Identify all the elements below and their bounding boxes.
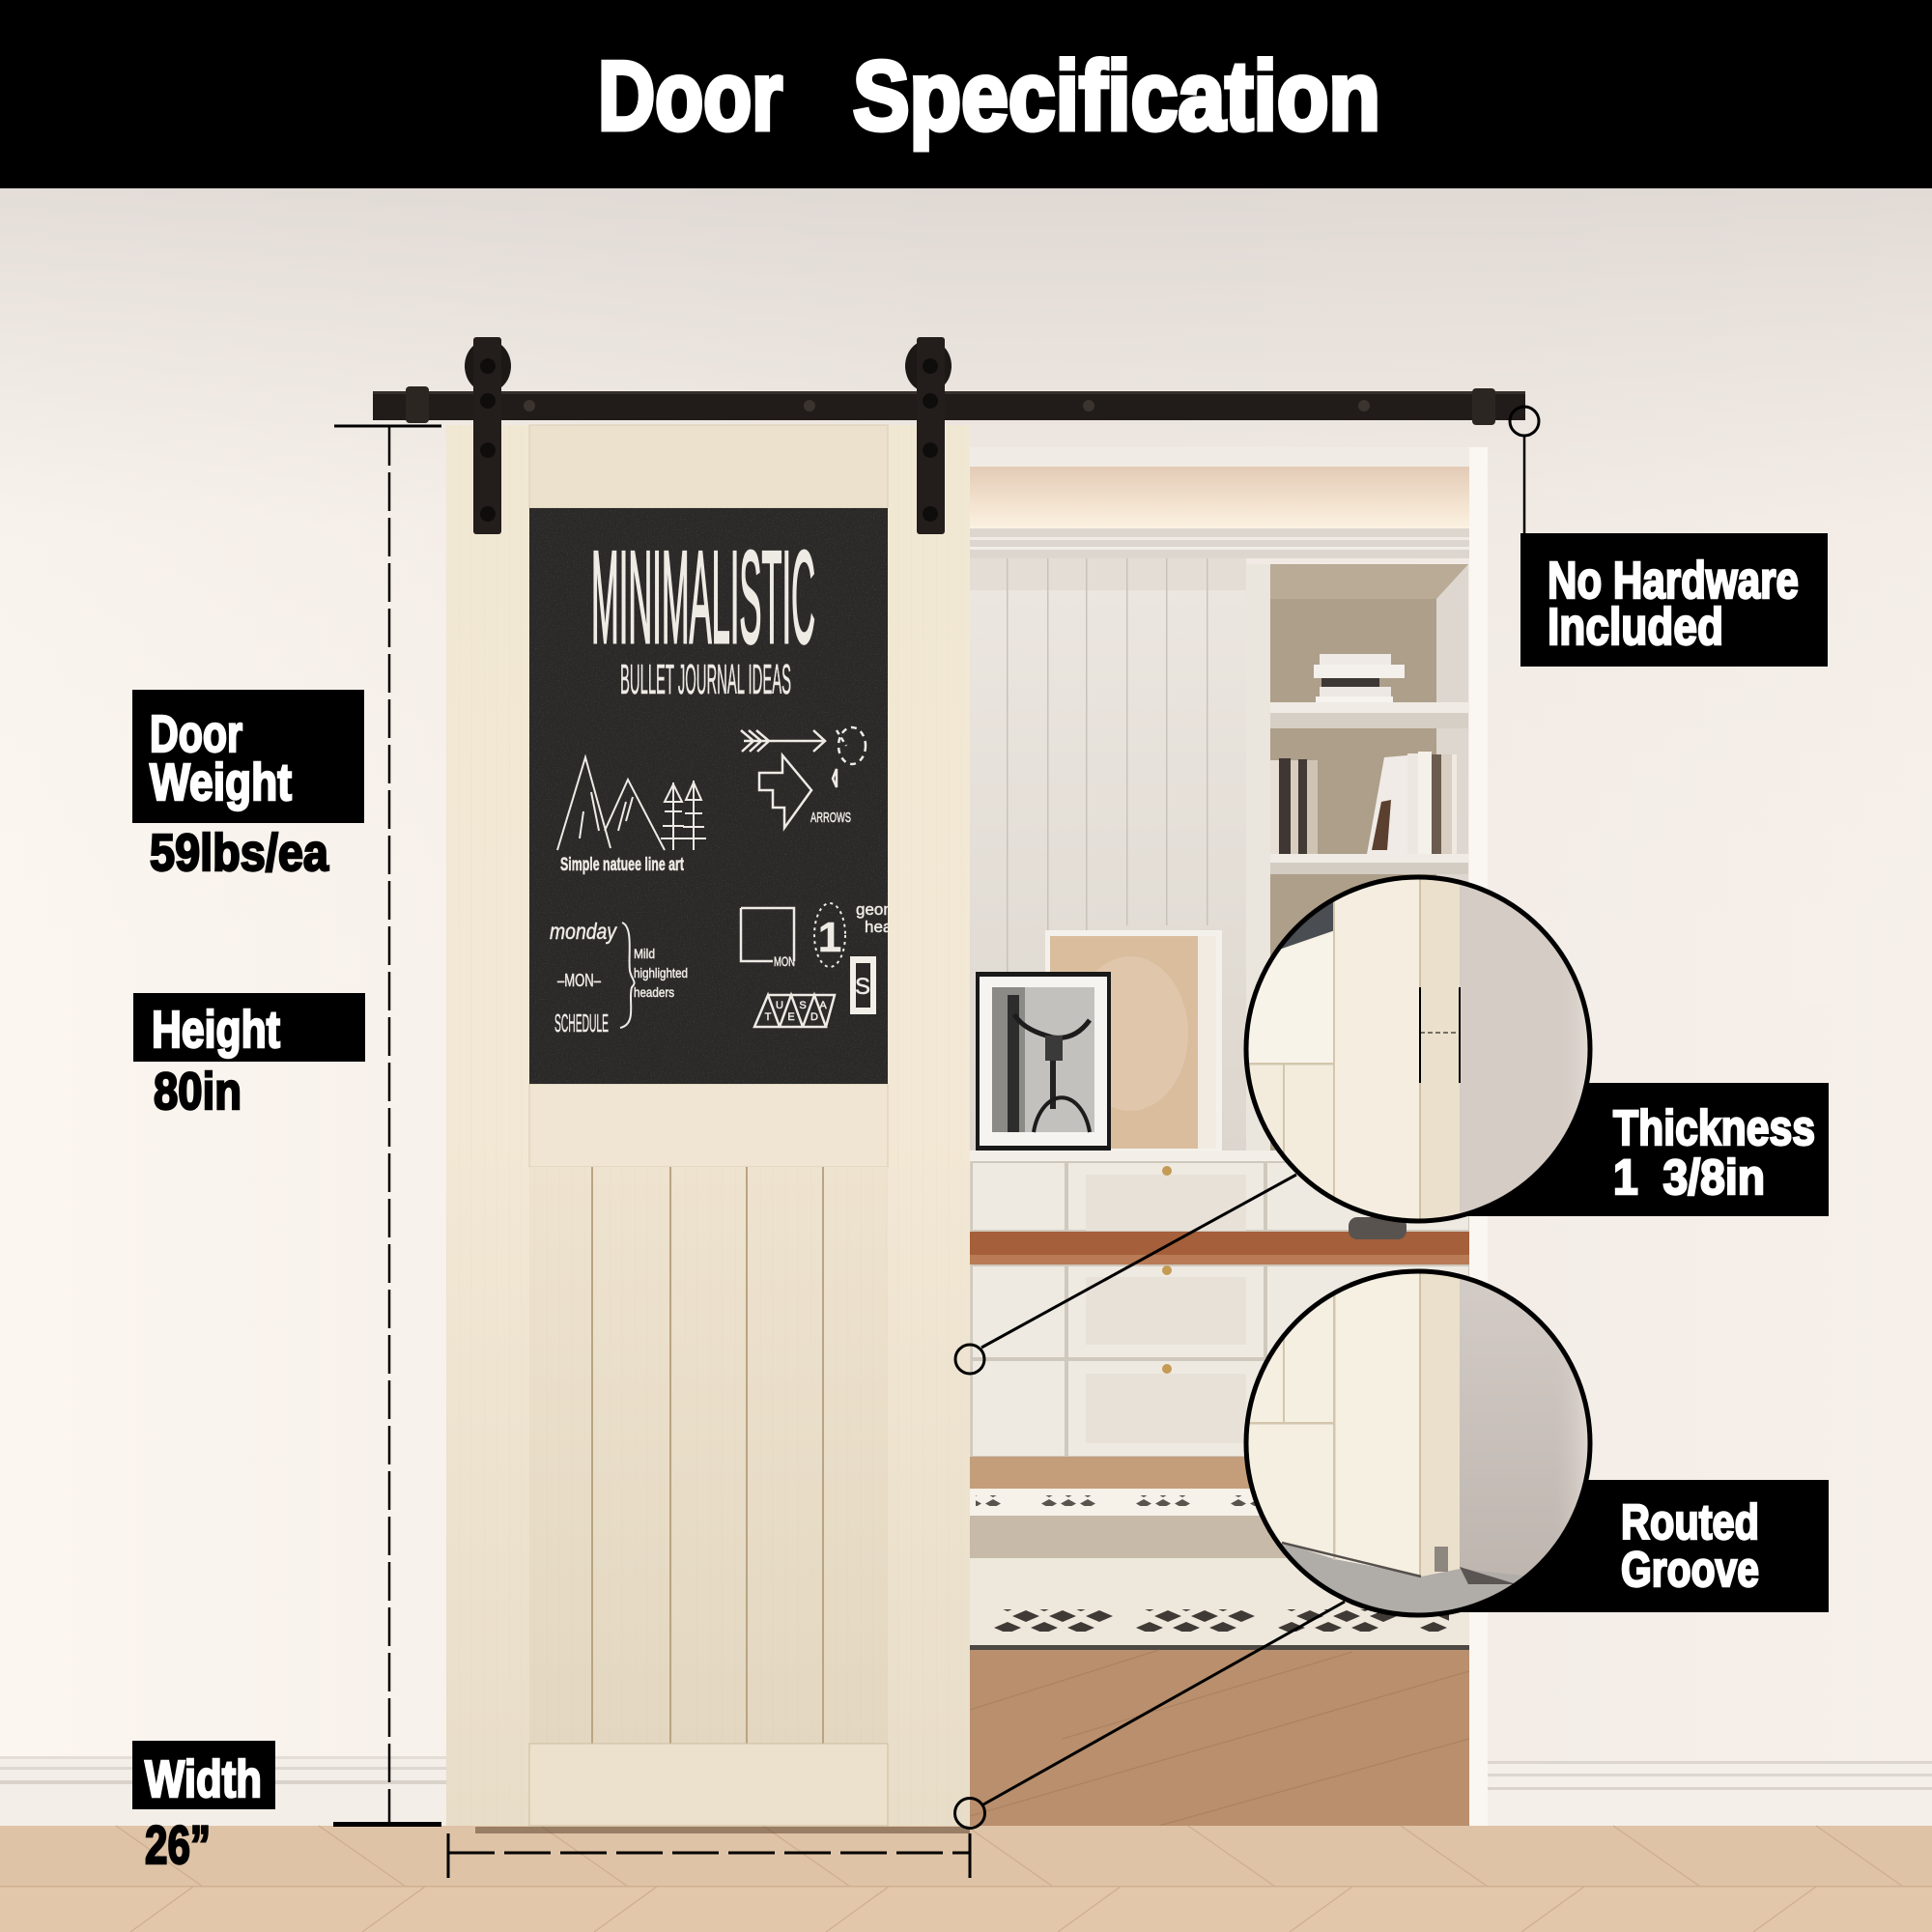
chalk artwork xyxy=(550,524,901,1037)
callout: door weight: Door xyxy=(150,705,242,763)
tuesday bunting: U xyxy=(776,1000,783,1011)
leader line to groove detail xyxy=(983,1602,1345,1804)
geometric heading text: geom xyxy=(856,900,897,919)
hanger left xyxy=(465,337,511,534)
label: thickness xyxy=(1613,1100,1815,1205)
leader line to thickness detail xyxy=(981,1175,1296,1348)
tuesday bunting: S xyxy=(799,1000,807,1011)
door bottom rail xyxy=(529,1744,888,1826)
value: door weight: 59lbs/ea xyxy=(150,824,329,882)
callout box: thickness xyxy=(1401,1083,1829,1216)
built-in shelves xyxy=(1246,564,1468,1163)
title xyxy=(598,43,1380,151)
framed bicycle photo xyxy=(976,972,1111,1151)
door opening casing xyxy=(970,447,1488,1826)
dotted number one xyxy=(814,903,845,967)
wood floor xyxy=(0,1826,1932,1932)
callout: door weight: Weight xyxy=(150,753,292,811)
stacked books xyxy=(1314,654,1405,702)
month box xyxy=(741,908,795,969)
small object on desk xyxy=(1349,1217,1406,1239)
callout: height: Height xyxy=(152,1001,280,1059)
barn door xyxy=(446,425,970,1826)
callout: no hardware included: Included xyxy=(1548,598,1723,656)
value: width: 26” xyxy=(145,1814,211,1875)
title: Door xyxy=(598,43,782,151)
large watercolor art print xyxy=(1045,930,1222,1151)
month box: MON xyxy=(774,953,795,969)
door planks xyxy=(529,1167,888,1744)
title: Specification xyxy=(853,43,1380,151)
chalk artwork: BULLET JOURNAL IDEAS xyxy=(620,656,791,703)
cabinets xyxy=(970,1151,1469,1457)
label: routed groove xyxy=(1621,1494,1759,1597)
monday schedule text xyxy=(550,919,688,1037)
hanger right xyxy=(905,337,952,534)
back floor and rug xyxy=(970,1457,1469,1826)
monday schedule text: highlighted xyxy=(634,965,688,980)
tuesday bunting: T xyxy=(765,1011,772,1023)
arrows sketches xyxy=(741,727,866,828)
tuesday bunting: E xyxy=(787,1011,795,1023)
chalk nature caption: Simple natuee line art xyxy=(560,855,684,875)
monday schedule text: Mild xyxy=(634,946,655,961)
letter S badge xyxy=(850,956,876,1014)
groove notch xyxy=(1435,1547,1448,1572)
monday schedule text: SCHEDULE xyxy=(554,1009,609,1037)
callout: no hardware included: No Hardware xyxy=(1548,552,1799,610)
height dimension line xyxy=(333,426,441,1824)
mountains and trees sketch xyxy=(557,757,706,850)
ceiling glow xyxy=(970,467,1469,528)
arrows caption: ARROWS xyxy=(810,810,851,826)
door mid rail xyxy=(529,1084,888,1167)
upright books xyxy=(1270,752,1457,854)
hardware anchor and leader xyxy=(1510,407,1539,533)
paneled wall xyxy=(970,558,1246,1160)
callout box: routed groove xyxy=(1401,1480,1829,1612)
chalkboard panel xyxy=(529,508,901,1084)
callout: width: Width xyxy=(145,1750,262,1808)
barn door rail xyxy=(373,386,1525,425)
baseboards xyxy=(0,1756,1932,1826)
callout: height xyxy=(133,993,365,1062)
width dimension line xyxy=(448,1833,970,1878)
label: routed groove: Routed xyxy=(1621,1494,1759,1549)
thickness dimension marks xyxy=(1420,987,1460,1083)
detail circle: routed groove xyxy=(1246,1265,1614,1623)
tuesday bunting xyxy=(754,995,835,1027)
monday schedule text: headers xyxy=(634,984,674,1000)
infographic canvas: MINIMALISTIC xyxy=(591,524,815,670)
label: thickness: 1 3/8in xyxy=(1613,1150,1765,1205)
monday schedule text: –MON– xyxy=(557,971,601,990)
letter S badge: S xyxy=(855,974,870,1000)
door top rail xyxy=(529,425,888,508)
tuesday bunting: D xyxy=(810,1011,818,1023)
anchor circle lower xyxy=(954,1799,985,1828)
value: height: 80in xyxy=(154,1063,242,1121)
detail circle: door thickness xyxy=(1246,869,1614,1236)
tuesday bunting: A xyxy=(819,1000,827,1011)
crown molding xyxy=(970,528,1469,558)
anchor circle upper xyxy=(955,1345,984,1374)
dotted number one: 1 xyxy=(818,914,841,961)
header bar xyxy=(0,0,1932,188)
monday schedule text: monday xyxy=(550,919,617,944)
label: routed groove: Groove xyxy=(1621,1542,1759,1597)
walnut desk top xyxy=(970,1232,1469,1264)
callout: no hardware included xyxy=(1520,533,1828,667)
label: thickness: Thickness xyxy=(1613,1100,1815,1155)
callout: door weight xyxy=(132,690,364,823)
geometric heading text: head xyxy=(865,918,901,936)
interior room scene xyxy=(970,467,1469,1826)
geometric heading text xyxy=(856,900,901,936)
